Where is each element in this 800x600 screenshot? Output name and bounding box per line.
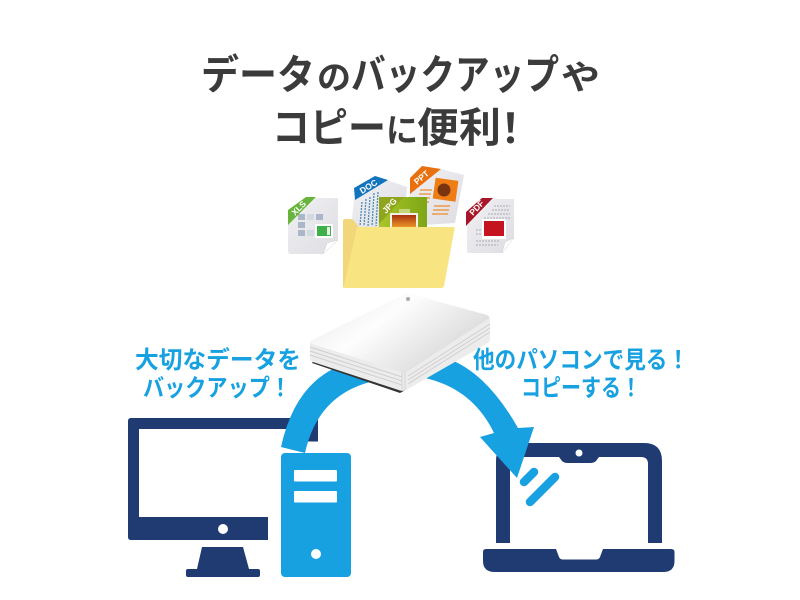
icon: JPG file [379,196,427,229]
label: backup: バックアップ！ [143,375,291,402]
label: copy [473,347,689,402]
title: に [386,112,418,149]
title: バックアップ [351,52,559,98]
title: コピー [272,105,386,151]
icon: folder [343,219,455,288]
title: ！ [490,106,531,152]
icon: PPT file: PPT [412,168,432,187]
icon: DOC file [351,176,407,231]
icon: XLS file [288,197,338,254]
title [201,52,600,152]
icon: PDF file: PDF [467,198,486,217]
label: copy: コピーする！ [521,375,641,402]
label: copy: 他のパソコンで見る！ [473,347,689,374]
title: や [561,59,600,96]
title: の [317,59,351,96]
icon: portable hard drive [310,294,490,393]
title: 便利 [417,105,501,151]
icon: screen glare marks [524,472,555,502]
icon: desktop monitor [128,418,318,577]
icon: DOC file: DOC [358,177,379,196]
icon: PDF file [466,198,514,253]
icon: laptop [483,443,674,572]
arrow: backup from PC to drive [281,368,370,453]
icon: PPT file [408,166,464,226]
icon: desktop tower [281,453,351,577]
arrow: copy from drive to laptop [420,358,534,478]
title: データ [201,52,315,98]
label: backup [135,346,301,402]
icon: JPG file: JPG [380,196,399,215]
label: backup: 大切なデータを [135,346,301,374]
icon: XLS file: XLS [289,198,308,217]
